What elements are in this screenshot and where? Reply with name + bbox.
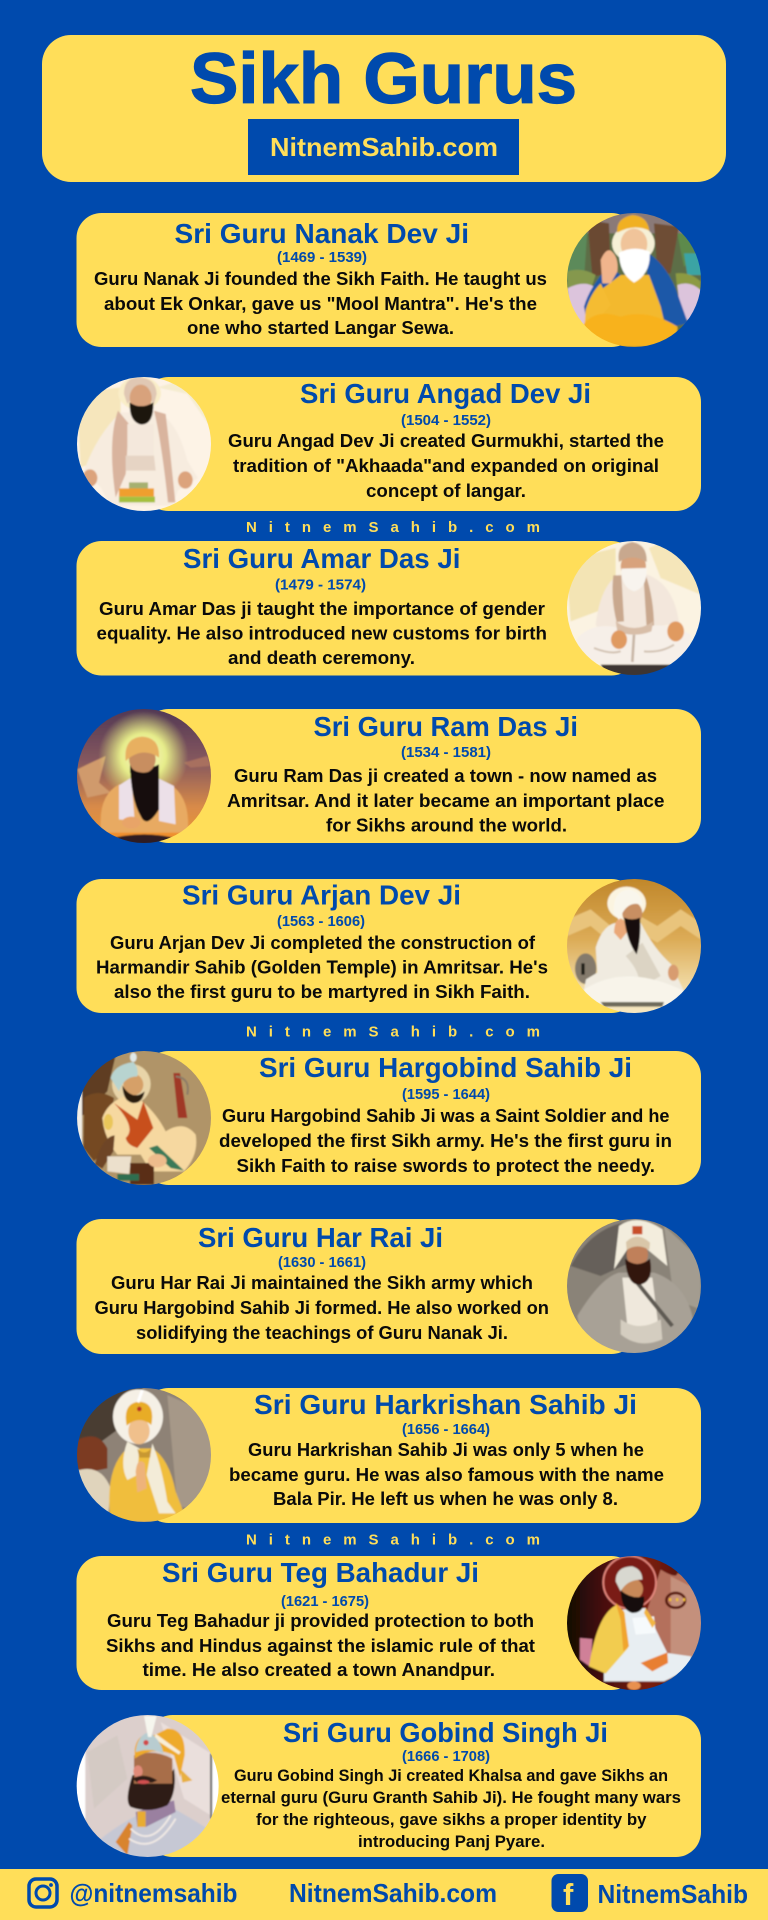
description: Sikh Faith to raise swords to protect the needy. xyxy=(236,1155,655,1176)
description xyxy=(96,932,548,1002)
years: (1563 - 1606) xyxy=(277,914,365,930)
description: also the first guru to be martyred in Sikh Faith. xyxy=(114,981,530,1002)
panel: Guru Gobind Singh Ji xyxy=(74,1712,701,1862)
years: (1595 - 1644) xyxy=(402,1087,490,1103)
watermark: NitnemSahib.com xyxy=(246,1024,540,1041)
panel: Guru Amar Das Ji xyxy=(76,538,704,678)
description: Guru Har Rai Ji maintained the Sikh army which xyxy=(111,1272,533,1293)
description: and death ceremony. xyxy=(228,647,415,668)
description xyxy=(106,1610,535,1680)
description: one who started Langar Sewa. xyxy=(187,317,454,338)
years: (1504 - 1552) xyxy=(401,413,491,429)
panel: Guru Har Rai Ji xyxy=(76,1216,704,1356)
heading: Sri Guru Gobind Singh Ji xyxy=(283,1717,608,1748)
panel: Guru Hargobind Sahib Ji xyxy=(74,1048,701,1188)
facebook name: NitnemSahib xyxy=(598,1879,748,1909)
description xyxy=(227,765,664,836)
description: about Ek Onkar, gave us "Mool Mantra". He's the xyxy=(104,293,537,314)
heading: Sri Guru Har Rai Ji xyxy=(198,1222,443,1253)
footer xyxy=(0,1869,768,1920)
title: Sikh Gurus xyxy=(190,40,577,119)
description: Guru Angad Dev Ji created Gurmukhi, started the xyxy=(228,430,664,451)
description xyxy=(219,1105,672,1176)
icon: portrait of Guru Arjan xyxy=(564,876,704,1016)
description: concept of langar. xyxy=(366,480,526,501)
description: developed the first Sikh army. He's the first guru in xyxy=(219,1130,672,1151)
instagram handle: @nitnemsahib xyxy=(70,1878,238,1908)
panel: Guru Arjan Dev Ji xyxy=(76,876,704,1016)
description: tradition of "Akhaada"and expanded on original xyxy=(233,455,659,476)
heading: Sri Guru Hargobind Sahib Ji xyxy=(259,1052,632,1083)
icon: portrait of Guru Harkrishan xyxy=(74,1385,214,1525)
description: Harmandir Sahib (Golden Temple) in Amritsar. He's xyxy=(96,956,548,978)
years: (1630 - 1661) xyxy=(278,1255,366,1271)
icon: portrait of Guru Nanak xyxy=(564,210,704,350)
heading: Sri Guru Angad Dev Ji xyxy=(300,378,591,409)
heading: Sri Guru Arjan Dev Ji xyxy=(182,880,461,911)
heading: Sri Guru Harkrishan Sahib Ji xyxy=(254,1389,637,1420)
icon: instagram xyxy=(29,1879,57,1907)
description xyxy=(94,268,547,338)
description: Guru Hargobind Sahib Ji formed. He also worked on xyxy=(94,1297,549,1318)
years: (1621 - 1675) xyxy=(281,1594,369,1610)
description xyxy=(228,430,664,501)
title panel xyxy=(42,35,726,182)
description xyxy=(94,1272,549,1343)
description: Amritsar. And it later became an important place xyxy=(227,790,664,811)
description: equality. He also introduced new customs for birth xyxy=(96,622,547,644)
icon: portrait of Guru Ram Das xyxy=(74,706,214,846)
description: Guru Harkrishan Sahib Ji was only 5 when he xyxy=(248,1439,644,1460)
icon: facebook: f xyxy=(563,1877,574,1912)
description: solidifying the teachings of Guru Nanak Ji. xyxy=(136,1322,508,1343)
years: (1534 - 1581) xyxy=(401,745,491,761)
heading: Sri Guru Amar Das Ji xyxy=(183,543,460,574)
years: (1656 - 1664) xyxy=(402,1422,490,1438)
watermark: NitnemSahib.com xyxy=(246,519,540,536)
description: Guru Arjan Dev Ji completed the construction of xyxy=(110,932,536,953)
icon: portrait of Guru Amar Das xyxy=(564,538,704,678)
icon: portrait of Guru Angad xyxy=(74,374,214,514)
icon: portrait of Guru Hargobind xyxy=(74,1048,214,1188)
icon: facebook xyxy=(552,1874,588,1912)
description xyxy=(221,1766,681,1851)
heading: Sri Guru Teg Bahadur Ji xyxy=(162,1557,479,1588)
panel: Guru Harkrishan Sahib Ji xyxy=(74,1385,701,1525)
description: Guru Ram Das ji created a town - now named as xyxy=(234,765,657,786)
panel: Guru Teg Bahadur Ji xyxy=(76,1553,704,1693)
icon: portrait of Guru Gobind Singh xyxy=(76,1715,219,1857)
watermark: NitnemSahib.com xyxy=(246,1532,540,1549)
icon: portrait of Guru Teg Bahadur xyxy=(564,1553,704,1693)
description: for the righteous, gave sikhs a proper identity by xyxy=(256,1810,647,1829)
description: Sikhs and Hindus against the islamic rule of that xyxy=(106,1635,535,1656)
description xyxy=(229,1439,664,1509)
panel: Guru Nanak Dev Ji xyxy=(76,210,704,350)
icon: portrait of Guru Har Rai xyxy=(564,1216,704,1356)
panel: Guru Ram Das Ji xyxy=(74,706,701,846)
description: Guru Teg Bahadur ji provided protection to both xyxy=(107,1610,534,1631)
heading: Sri Guru Ram Das Ji xyxy=(314,711,578,742)
description: Guru Amar Das ji taught the importance of gender xyxy=(99,598,545,619)
years: (1469 - 1539) xyxy=(277,250,367,266)
description xyxy=(96,598,547,668)
description: introducing Panj Pyare. xyxy=(358,1832,545,1851)
heading: Sri Guru Nanak Dev Ji xyxy=(174,218,469,249)
description: Guru Nanak Ji founded the Sikh Faith. He taught us xyxy=(94,268,547,289)
description: became guru. He was also famous with the name xyxy=(229,1464,664,1485)
years: (1666 - 1708) xyxy=(402,1749,490,1765)
description: for Sikhs around the world. xyxy=(326,815,567,836)
panel: Guru Angad Dev Ji xyxy=(74,374,701,514)
description: time. He also created a town Anandpur. xyxy=(142,1659,495,1680)
website badge: NitnemSahib.com xyxy=(270,132,498,162)
description: Guru Hargobind Sahib Ji was a Saint Soldier and he xyxy=(222,1105,670,1126)
years: (1479 - 1574) xyxy=(275,578,366,594)
website: NitnemSahib.com xyxy=(289,1878,497,1908)
description: Bala Pir. He left us when he was only 8. xyxy=(273,1488,618,1509)
description: Guru Gobind Singh Ji created Khalsa and gave Sikhs an xyxy=(234,1766,668,1785)
website badge xyxy=(248,119,519,175)
description: eternal guru (Guru Granth Sahib Ji). He fought many wars xyxy=(221,1788,681,1807)
